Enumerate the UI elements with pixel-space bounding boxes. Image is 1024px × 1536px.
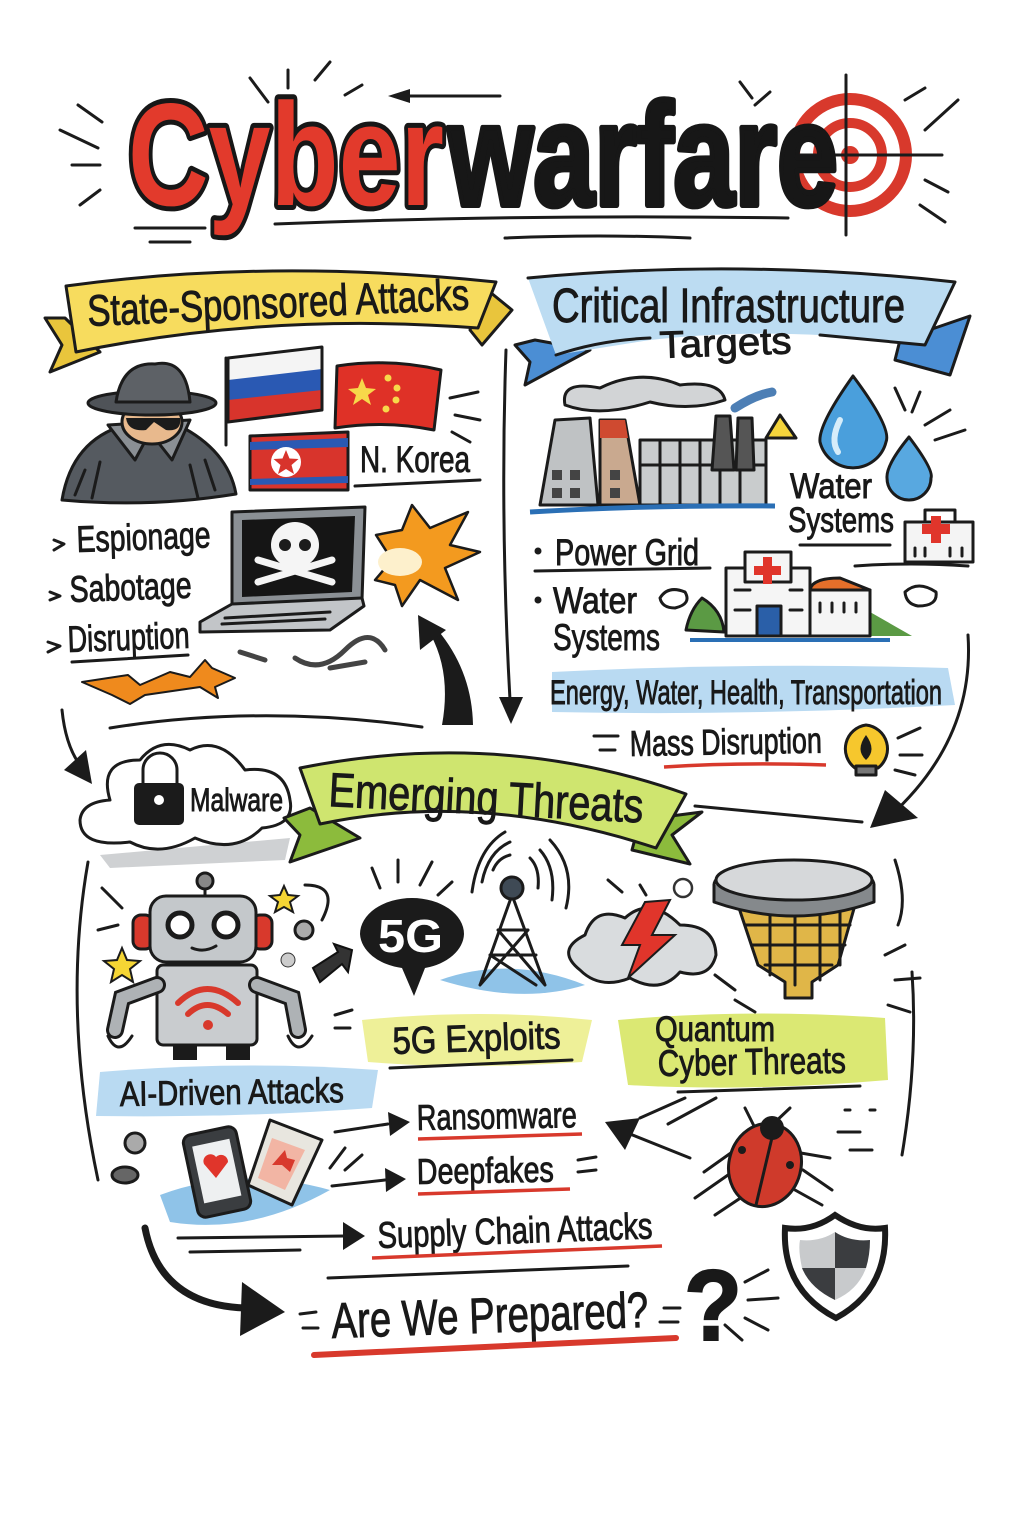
title word: warfare: warfare: [447, 73, 838, 236]
label: quantum cyber threats: [618, 1010, 888, 1092]
explosion core: [378, 548, 422, 576]
icon: orange sparks: [82, 660, 235, 704]
icon: bug: [695, 1108, 875, 1215]
icon: 5G bubble: 5G: [378, 910, 443, 962]
malware cloud: Malware: [190, 782, 283, 818]
green banner: [284, 753, 702, 864]
list: infrastructure: Systems: [553, 617, 660, 658]
label: quantum cyber threats: Cyber Threats: [657, 1040, 846, 1084]
icon: phone and tablet: [112, 1120, 330, 1225]
label: N. Korea: N. Korea: [360, 439, 470, 480]
arrow: bug to ransomware: [605, 1098, 716, 1158]
icon: large water drop: [820, 376, 887, 468]
arrow: vertical down: [499, 350, 523, 724]
green banner: Emerging Threats: [327, 764, 645, 833]
frame curves: [77, 860, 914, 1180]
title underline: [135, 217, 788, 242]
label: water systems: Water: [790, 467, 872, 506]
icon: China flag: [335, 363, 441, 430]
connector curves: [62, 710, 862, 822]
label: deepfakes: [330, 1148, 596, 1194]
label: AI-driven attacks: AI-Driven Attacks: [119, 1071, 344, 1114]
list: attack types: [48, 514, 211, 662]
label: mass disruption: Mass Disruption: [629, 720, 822, 764]
arrow: curve to emerging threats: [870, 635, 969, 828]
list: attack types: Espionage: [76, 514, 211, 560]
icon: 5G bubble: [360, 860, 464, 996]
icon: shield: [785, 1215, 885, 1318]
label: supply chain attacks: Supply Chain Attacks: [377, 1205, 653, 1256]
icon: hospital: [660, 552, 936, 640]
icon: target: [790, 75, 942, 235]
label: water systems: Systems: [788, 501, 894, 540]
icon: power plant: [530, 377, 775, 512]
closing question: Are We Prepared?: [330, 1282, 649, 1349]
icon: warning triangle: [766, 415, 796, 438]
panel: emerging threats: [77, 744, 920, 1362]
title: [60, 62, 958, 242]
icon: question mark: ?: [684, 1250, 742, 1362]
title sparks: [60, 62, 958, 222]
label: deepfakes: Deepfakes: [416, 1149, 554, 1192]
panel: critical infrastructure targets: [499, 269, 973, 828]
list: infrastructure: Power Grid: [555, 532, 699, 573]
icon: cell tower: [440, 832, 585, 994]
list: attack types: Disruption: [67, 615, 190, 660]
icon: explosion: [375, 505, 480, 606]
debris marks: [240, 638, 385, 668]
icon: laptop with skull: [200, 507, 365, 632]
list: infrastructure: Water: [553, 580, 637, 621]
icon: North Korea flag: [250, 432, 348, 490]
arrow: curved up: [418, 615, 473, 725]
label: water systems: [788, 388, 968, 566]
blue banner: Critical Infrastructure: [552, 280, 905, 333]
icon: small water drop: [887, 437, 931, 500]
icon: small hospital: [905, 510, 973, 562]
icon: robot: [98, 873, 352, 1060]
list: infrastructure: [534, 532, 710, 658]
label: ransomware: Ransomware: [416, 1094, 577, 1138]
icon: Russia flag: [226, 347, 322, 445]
list: attack types: Sabotage: [69, 565, 192, 610]
drop highlight: [834, 420, 840, 452]
arrow: large curve to question: [145, 1228, 285, 1336]
blue banner: Targets: [659, 320, 792, 367]
question mark sparks: [725, 1270, 778, 1340]
icon: quantum chip: [714, 860, 920, 1012]
label: 5G exploits: 5G Exploits: [392, 1015, 561, 1063]
icon: spy: [62, 363, 236, 503]
yellow banner: [45, 270, 512, 372]
title word: Cyber: Cyber: [128, 73, 444, 236]
arrow: robot to 5G: [313, 944, 352, 982]
small arrowhead: [388, 89, 410, 103]
label: mass disruption: [594, 720, 922, 775]
closing question: [300, 1266, 680, 1355]
icon: padlock: [134, 753, 184, 825]
blue banner: [515, 269, 970, 385]
yellow banner: State-Sponsored Attacks: [86, 270, 470, 336]
label: quantum cyber threats: Quantum: [655, 1010, 775, 1049]
malware cloud: [80, 744, 291, 868]
icon: lightbulb: [845, 725, 888, 775]
panel: state-sponsored attacks: [45, 270, 512, 725]
label: ransomware: [335, 1094, 582, 1139]
icon: storm cloud: [569, 879, 716, 985]
label: supply chain attacks: [178, 1205, 662, 1258]
